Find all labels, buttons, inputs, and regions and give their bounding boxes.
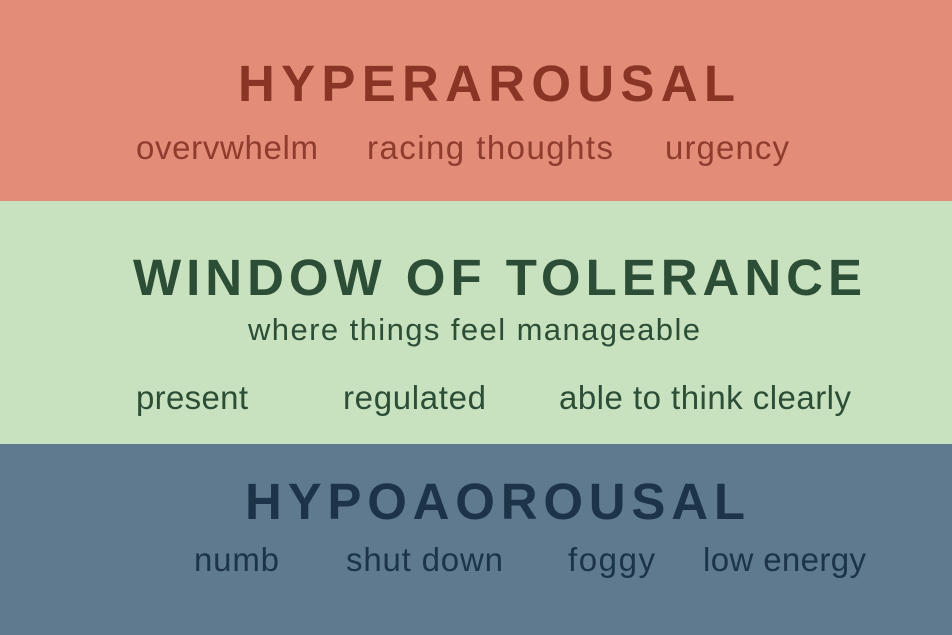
heading: hyperarousal: HYPERAROUSAL (238, 55, 735, 112)
text: hypoarousal states: numb (194, 541, 279, 578)
text: hypoarousal states: low energy (703, 541, 866, 578)
text: window states (136, 379, 852, 416)
text: hyperarousal states: urgency (665, 129, 790, 166)
text: hyperarousal states: racing thoughts (367, 129, 613, 166)
text: hyperarousal states: overvwhelm (136, 129, 318, 166)
panel: window of tolerance (0, 201, 952, 444)
subtitle: where things feel manageable (247, 312, 700, 347)
text: hypoarousal states (194, 541, 866, 578)
text: hyperarousal states (136, 129, 790, 166)
text: hypoarousal states: foggy (568, 541, 656, 578)
panel: hyperarousal (0, 0, 952, 201)
heading: hypoarousal: HYPOAOROUSAL (245, 473, 745, 530)
text: window states: regulated (343, 379, 486, 416)
text: window states: present (136, 379, 248, 416)
panel: hypoarousal (0, 444, 952, 635)
text: window states: able to think clearly (559, 379, 852, 416)
heading: window of tolerance: WINDOW OF TOLERANCE (133, 249, 862, 306)
text: hypoarousal states: shut down (346, 541, 503, 578)
